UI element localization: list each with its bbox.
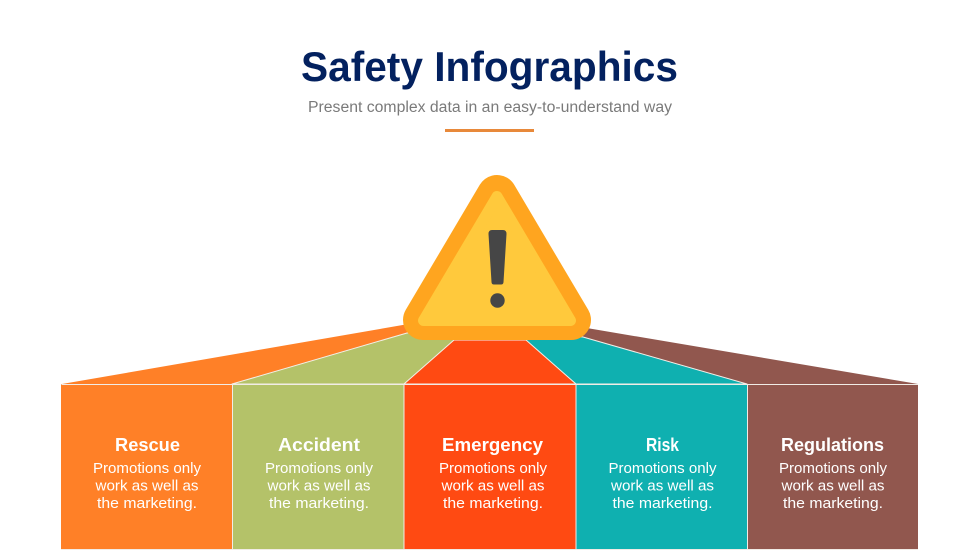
panel: risk [576,384,747,549]
text: accident description: the marketing. [269,495,369,512]
text: regulations description: the marketing. [783,495,883,512]
subtitle: Present complex data in an easy-to-understand way [308,99,672,116]
text: emergency description: the marketing. [443,495,543,512]
icon: warning triangle [423,195,571,320]
text: accident description [265,460,373,512]
text: accident description: Promotions only [265,460,373,477]
roof: risk [510,330,747,384]
title: Safety Infographics [301,43,678,90]
text: risk description [608,460,717,512]
fan roof above the columns [62,322,918,384]
heading: emergency: Emergency [442,434,544,455]
text: risk description: the marketing. [612,495,712,512]
panel: regulations [747,384,918,549]
text: risk description: work as well as [610,478,714,494]
heading: rescue: Rescue [115,434,180,455]
text: emergency description: Promotions only [439,460,547,477]
text: rescue description: Promotions only [93,460,201,477]
icon: exclamation mark [488,230,506,308]
roof: regulations [575,326,918,384]
panel: emergency [404,384,576,549]
roof: emergency [404,340,576,384]
roof: accident [232,330,470,384]
accent underline [445,129,534,132]
text: rescue description: work as well as [94,478,198,494]
text: regulations description: Promotions only [779,460,887,477]
text: emergency description [439,460,547,512]
text: emergency description: work as well as [440,478,544,494]
text: rescue description [93,460,201,512]
roof: rescue [62,322,420,384]
text: regulations description: work as well as [780,478,884,494]
text: risk description: Promotions only [608,460,717,477]
heading: risk: Risk [646,434,680,455]
text: rescue description: the marketing. [97,495,197,512]
heading: accident: Accident [278,434,360,455]
panel: rescue [61,384,232,549]
text: accident description: work as well as [266,478,370,494]
panel: accident [232,384,404,549]
text: regulations description [779,460,887,512]
heading: regulations: Regulations [781,434,884,455]
